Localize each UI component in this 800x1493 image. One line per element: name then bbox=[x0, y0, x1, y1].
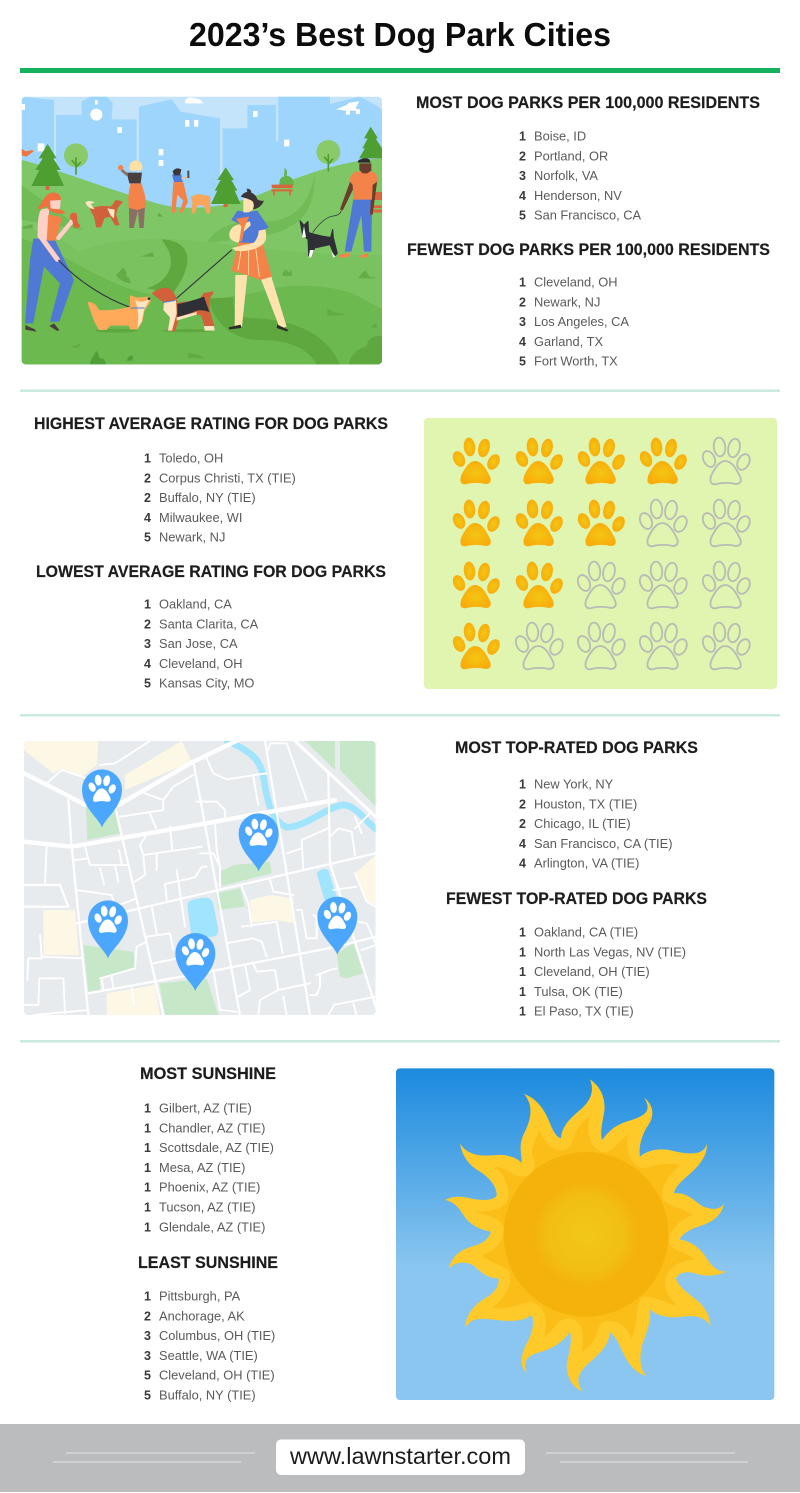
list: highest average rating for dog parks: 1 bbox=[144, 452, 151, 466]
list: highest average rating for dog parks bbox=[34, 415, 388, 545]
list: most sunshine bbox=[140, 1065, 276, 1234]
list: most sunshine: Gilbert, AZ (TIE) bbox=[159, 1100, 252, 1116]
illustration: street map with paw pins bbox=[24, 739, 377, 1015]
list: most top-rated dog parks: San Francisco, CA (TIE) bbox=[534, 836, 672, 851]
list: least sunshine: Columbus, OH (TIE) bbox=[159, 1328, 275, 1343]
hills bbox=[22, 158, 382, 364]
list: fewest dog parks per 100,000 residents: Newark, NJ bbox=[534, 294, 600, 309]
list: fewest dog parks per 100,000 residents: Cleveland, OH bbox=[534, 274, 618, 290]
list: most top-rated dog parks: New York, NY bbox=[534, 776, 614, 792]
list: most dog parks per 100,000 residents: San Francisco, CA bbox=[534, 208, 642, 223]
list: most top-rated dog parks bbox=[455, 739, 698, 871]
tree: right pine bbox=[359, 127, 382, 158]
list: highest average rating for dog parks: 5 bbox=[144, 531, 151, 545]
man on right bbox=[313, 158, 378, 258]
list: fewest top-rated dog parks bbox=[446, 890, 707, 1019]
list: most sunshine: Phoenix, AZ (TIE) bbox=[159, 1180, 260, 1195]
title: 2023’s Best Dog Park Cities bbox=[189, 16, 611, 53]
list: least sunshine: 2 bbox=[144, 1309, 151, 1323]
list: highest average rating for dog parks: HIGHEST AVERAGE RATING FOR DOG PARKS bbox=[34, 415, 388, 433]
list: fewest dog parks per 100,000 residents: 1 bbox=[519, 276, 526, 290]
list: most dog parks per 100,000 residents: Boise, ID bbox=[534, 128, 586, 144]
list: least sunshine: 5 bbox=[144, 1388, 151, 1402]
list: fewest top-rated dog parks: FEWEST TOP-RATED DOG PARKS bbox=[446, 890, 707, 908]
list: most sunshine: MOST SUNSHINE bbox=[140, 1065, 276, 1083]
list: most sunshine: Mesa, AZ (TIE) bbox=[159, 1160, 245, 1175]
list: fewest dog parks per 100,000 residents: Fort Worth, TX bbox=[534, 354, 618, 369]
map pin 3 bbox=[88, 900, 128, 958]
list: most dog parks per 100,000 residents: MOST DOG PARKS PER 100,000 RESIDENTS bbox=[416, 94, 760, 112]
list: fewest dog parks per 100,000 residents: Garland, TX bbox=[534, 334, 603, 349]
list: most dog parks per 100,000 residents: 4 bbox=[519, 189, 526, 203]
list: least sunshine: LEAST SUNSHINE bbox=[138, 1254, 278, 1272]
list: lowest average rating for dog parks: Kansas City, MO bbox=[159, 676, 254, 691]
woman in orange skirt bbox=[226, 189, 289, 331]
list: most top-rated dog parks: MOST TOP-RATED DOG PARKS bbox=[455, 739, 698, 757]
list: least sunshine: 3 bbox=[144, 1349, 151, 1363]
list: most dog parks per 100,000 residents: Henderson, NV bbox=[534, 188, 622, 203]
list: lowest average rating for dog parks: San Jose, CA bbox=[159, 636, 238, 651]
map pin 2 bbox=[239, 813, 279, 871]
list: highest average rating for dog parks: Toledo, OH bbox=[159, 450, 223, 466]
list: fewest dog parks per 100,000 residents: Los Angeles, CA bbox=[534, 314, 629, 329]
list: highest average rating for dog parks: Milwaukee, WI bbox=[159, 510, 243, 525]
list: fewest dog parks per 100,000 residents bbox=[407, 241, 770, 369]
list: lowest average rating for dog parks bbox=[36, 563, 386, 691]
list: least sunshine: Buffalo, NY (TIE) bbox=[159, 1388, 256, 1402]
list: most sunshine: 1 bbox=[144, 1161, 151, 1175]
tree: centre pine bbox=[211, 167, 241, 204]
list: lowest average rating for dog parks: 4 bbox=[144, 657, 151, 671]
list: fewest top-rated dog parks: 1 bbox=[519, 985, 526, 999]
list: most sunshine: 1 bbox=[144, 1181, 151, 1195]
list: lowest average rating for dog parks: 3 bbox=[144, 637, 151, 651]
back dog bbox=[85, 201, 122, 227]
beagle bbox=[152, 288, 215, 332]
list: most dog parks per 100,000 residents bbox=[416, 94, 760, 223]
list: lowest average rating for dog parks: Cleveland, OH bbox=[159, 656, 243, 671]
list: fewest dog parks per 100,000 residents: 3 bbox=[519, 315, 526, 329]
list: most top-rated dog parks: Arlington, VA (TIE) bbox=[534, 856, 639, 871]
list: highest average rating for dog parks: 4 bbox=[144, 511, 151, 525]
list: most top-rated dog parks: Houston, TX (TIE) bbox=[534, 796, 637, 811]
list: fewest dog parks per 100,000 residents: 5 bbox=[519, 355, 526, 369]
illustration: people walking dogs in a park bbox=[22, 97, 382, 364]
list: most sunshine: 1 bbox=[144, 1141, 151, 1155]
website pill bbox=[276, 1440, 525, 1475]
list: least sunshine bbox=[138, 1254, 278, 1402]
website pill: www.lawnstarter.com bbox=[289, 1443, 511, 1469]
list: fewest dog parks per 100,000 residents: 2 bbox=[519, 295, 526, 309]
map pin 4 bbox=[175, 933, 215, 991]
list: lowest average rating for dog parks: Oakland, CA bbox=[159, 596, 232, 612]
list: least sunshine: 5 bbox=[144, 1369, 151, 1383]
woman with red hair, blue trousers bbox=[25, 193, 80, 332]
corgi bbox=[88, 296, 150, 333]
list: highest average rating for dog parks: Buffalo, NY (TIE) bbox=[159, 490, 256, 505]
list: lowest average rating for dog parks: 1 bbox=[144, 598, 151, 612]
list: most sunshine: 1 bbox=[144, 1220, 151, 1234]
list: highest average rating for dog parks: 2 bbox=[144, 471, 151, 485]
list: most sunshine: Scottsdale, AZ (TIE) bbox=[159, 1140, 274, 1155]
list: fewest top-rated dog parks: Cleveland, OH (TIE) bbox=[534, 964, 650, 979]
list: most sunshine: 1 bbox=[144, 1102, 151, 1116]
list: most top-rated dog parks: 4 bbox=[519, 857, 526, 871]
list: most sunshine: 1 bbox=[144, 1121, 151, 1135]
list: most dog parks per 100,000 residents: 3 bbox=[519, 169, 526, 183]
list: highest average rating for dog parks: 2 bbox=[144, 491, 151, 505]
black and white dog bbox=[300, 221, 337, 256]
list: least sunshine: Pittsburgh, PA bbox=[159, 1288, 241, 1304]
list: highest average rating for dog parks: Corpus Christi, TX (TIE) bbox=[159, 470, 296, 485]
list: most top-rated dog parks: 1 bbox=[519, 778, 526, 792]
benches bbox=[279, 168, 294, 185]
list: most sunshine: 1 bbox=[144, 1200, 151, 1214]
leashes bbox=[58, 250, 232, 308]
list: fewest top-rated dog parks: 1 bbox=[519, 1005, 526, 1019]
list: most sunshine: Glendale, AZ (TIE) bbox=[159, 1219, 265, 1234]
tree: left pine bbox=[31, 144, 64, 186]
list: lowest average rating for dog parks: 5 bbox=[144, 677, 151, 691]
list: most top-rated dog parks: 4 bbox=[519, 837, 526, 851]
list: fewest top-rated dog parks: Tulsa, OK (TIE) bbox=[534, 984, 623, 999]
list: fewest top-rated dog parks: El Paso, TX (TIE) bbox=[534, 1004, 634, 1019]
list: highest average rating for dog parks: Newark, NJ bbox=[159, 530, 225, 545]
list: fewest dog parks per 100,000 residents: 4 bbox=[519, 335, 526, 349]
list: lowest average rating for dog parks: Santa Clarita, CA bbox=[159, 616, 259, 631]
list: least sunshine: Anchorage, AK bbox=[159, 1308, 245, 1323]
list: fewest top-rated dog parks: 1 bbox=[519, 965, 526, 979]
map pin 1 bbox=[82, 769, 122, 827]
list: most dog parks per 100,000 residents: Portland, OR bbox=[534, 148, 608, 163]
list: least sunshine: 1 bbox=[144, 1290, 151, 1304]
list: most dog parks per 100,000 residents: 5 bbox=[519, 209, 526, 223]
list: most dog parks per 100,000 residents: 1 bbox=[519, 130, 526, 144]
list: most dog parks per 100,000 residents: Norfolk, VA bbox=[534, 168, 598, 183]
panel: paw rating grid bbox=[424, 418, 777, 689]
footer band bbox=[0, 1424, 800, 1492]
list: fewest top-rated dog parks: 1 bbox=[519, 945, 526, 959]
map pin 5 bbox=[317, 897, 357, 955]
list: least sunshine: Seattle, WA (TIE) bbox=[159, 1348, 258, 1363]
list: least sunshine: 3 bbox=[144, 1329, 151, 1343]
back woman bbox=[118, 160, 146, 228]
small orange dog bbox=[192, 195, 210, 213]
list: most dog parks per 100,000 residents: 2 bbox=[519, 149, 526, 163]
list: least sunshine: Cleveland, OH (TIE) bbox=[159, 1368, 275, 1383]
list: most top-rated dog parks: Chicago, IL (TIE) bbox=[534, 816, 631, 831]
list: fewest top-rated dog parks: Oakland, CA (TIE) bbox=[534, 924, 638, 940]
list: fewest dog parks per 100,000 residents: FEWEST DOG PARKS PER 100,000 RESIDENTS bbox=[407, 241, 770, 259]
list: lowest average rating for dog parks: 2 bbox=[144, 617, 151, 631]
list: most top-rated dog parks: 2 bbox=[519, 817, 526, 831]
list: fewest top-rated dog parks: North Las Vegas, NV (TIE) bbox=[534, 944, 686, 959]
list: fewest top-rated dog parks: 1 bbox=[519, 926, 526, 940]
list: most sunshine: Tucson, AZ (TIE) bbox=[159, 1200, 256, 1214]
illustration: sun in blue sky bbox=[396, 1068, 774, 1400]
list: most sunshine: Chandler, AZ (TIE) bbox=[159, 1120, 265, 1135]
list: lowest average rating for dog parks: LOWEST AVERAGE RATING FOR DOG PARKS bbox=[36, 563, 386, 581]
list: most top-rated dog parks: 2 bbox=[519, 797, 526, 811]
woman with phone bbox=[171, 168, 189, 213]
